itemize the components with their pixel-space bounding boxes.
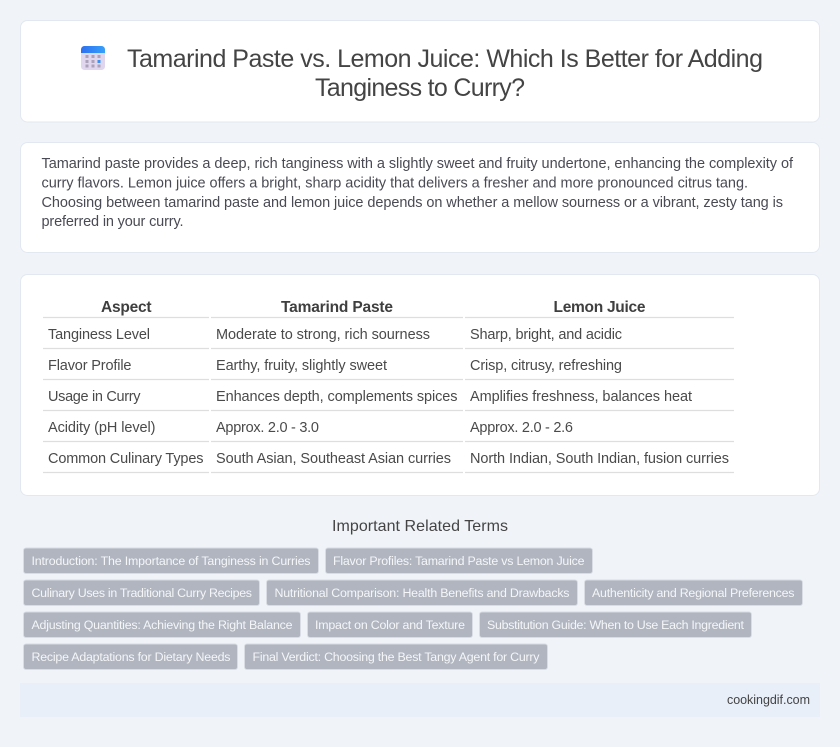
row: tanginess level: Tanginess Level <box>48 327 150 343</box>
related terms tags <box>24 548 802 670</box>
title text <box>127 45 763 102</box>
panel: introduction text: curry flavors. Lemon juice offers a bright, sharp acidity that delivers a fresher and more pronounced citrus tang. <box>42 176 748 192</box>
tag <box>244 644 548 670</box>
panel: introduction text: Choosing between tamarind paste and lemon juice depends on whether a mellow sourness or a vibrant, zesty tang is <box>42 195 783 211</box>
row: tanginess level: Sharp, bright, and acidic <box>470 327 622 343</box>
tag: Introduction: The Importance of Tanginess in Curries <box>32 554 310 568</box>
row: flavor profile: Flavor Profile <box>48 358 132 374</box>
table header: Lemon Juice <box>554 299 646 316</box>
panel: title <box>20 20 820 122</box>
tag <box>24 612 300 638</box>
tag: Culinary Uses in Traditional Curry Recipes <box>32 586 252 600</box>
row: common culinary types: North Indian, South Indian, fusion curries <box>470 451 729 467</box>
heading: important related terms: Important Related Terms <box>332 518 508 535</box>
footer <box>20 683 820 717</box>
row: acidity <box>43 420 734 442</box>
row: usage in curry: Amplifies freshness, balances heat <box>470 389 692 405</box>
tag <box>584 580 802 606</box>
row: common culinary types: Common Culinary Types <box>48 451 204 467</box>
panel: introduction text: preferred in your curry. <box>42 214 184 230</box>
row: usage in curry: Usage in Curry <box>48 389 141 405</box>
table header: Aspect <box>101 299 152 316</box>
row: flavor profile: Earthy, fruity, slightly sweet <box>216 358 387 374</box>
row: usage in curry: Enhances depth, complements spices <box>216 389 458 405</box>
row: flavor profile: Crisp, citrusy, refreshing <box>470 358 622 374</box>
row: common culinary types: South Asian, Southeast Asian curries <box>216 451 451 467</box>
row: flavor profile <box>43 358 734 380</box>
tag <box>266 580 578 606</box>
tag <box>480 612 752 638</box>
row: usage in curry <box>43 389 734 410</box>
tag: Nutritional Comparison: Health Benefits and Drawbacks <box>274 586 570 600</box>
title text: Tamarind Paste vs. Lemon Juice: Which Is Better for Adding <box>127 45 763 73</box>
tag <box>24 644 238 670</box>
tag: Final Verdict: Choosing the Best Tangy Agent for Curry <box>252 650 540 664</box>
icon: calendar <box>81 46 105 70</box>
tag <box>326 548 592 574</box>
tag: Substitution Guide: When to Use Each Ingredient <box>487 618 745 632</box>
tag <box>308 612 472 638</box>
row: acidity: Approx. 2.0 - 3.0 <box>216 420 319 436</box>
footer: cookingdif.com <box>727 693 810 707</box>
tag: Impact on Color and Texture <box>315 618 465 632</box>
row: common culinary types <box>43 451 734 472</box>
table header <box>43 299 734 318</box>
row: acidity: Acidity (pH level) <box>48 420 156 436</box>
tag <box>24 580 260 606</box>
tag: Recipe Adaptations for Dietary Needs <box>32 650 230 664</box>
row: tanginess level: Moderate to strong, rich sourness <box>216 327 430 343</box>
row: acidity: Approx. 2.0 - 2.6 <box>470 420 573 436</box>
panel: introduction text: Tamarind paste provides a deep, rich tanginess with a slightly sweet and fruity undertone, enhancing the complexity of <box>42 156 794 172</box>
panel: introduction text <box>20 142 820 252</box>
tag: Authenticity and Regional Preferences <box>592 586 794 600</box>
title text: Tanginess to Curry? <box>315 74 525 102</box>
panel: comparison table <box>20 274 820 496</box>
tag: Adjusting Quantities: Achieving the Right Balance <box>32 618 293 632</box>
table header: Tamarind Paste <box>281 299 393 316</box>
row: tanginess level <box>43 327 734 348</box>
tag <box>24 548 318 574</box>
tag: Flavor Profiles: Tamarind Paste vs Lemon Juice <box>333 554 585 568</box>
